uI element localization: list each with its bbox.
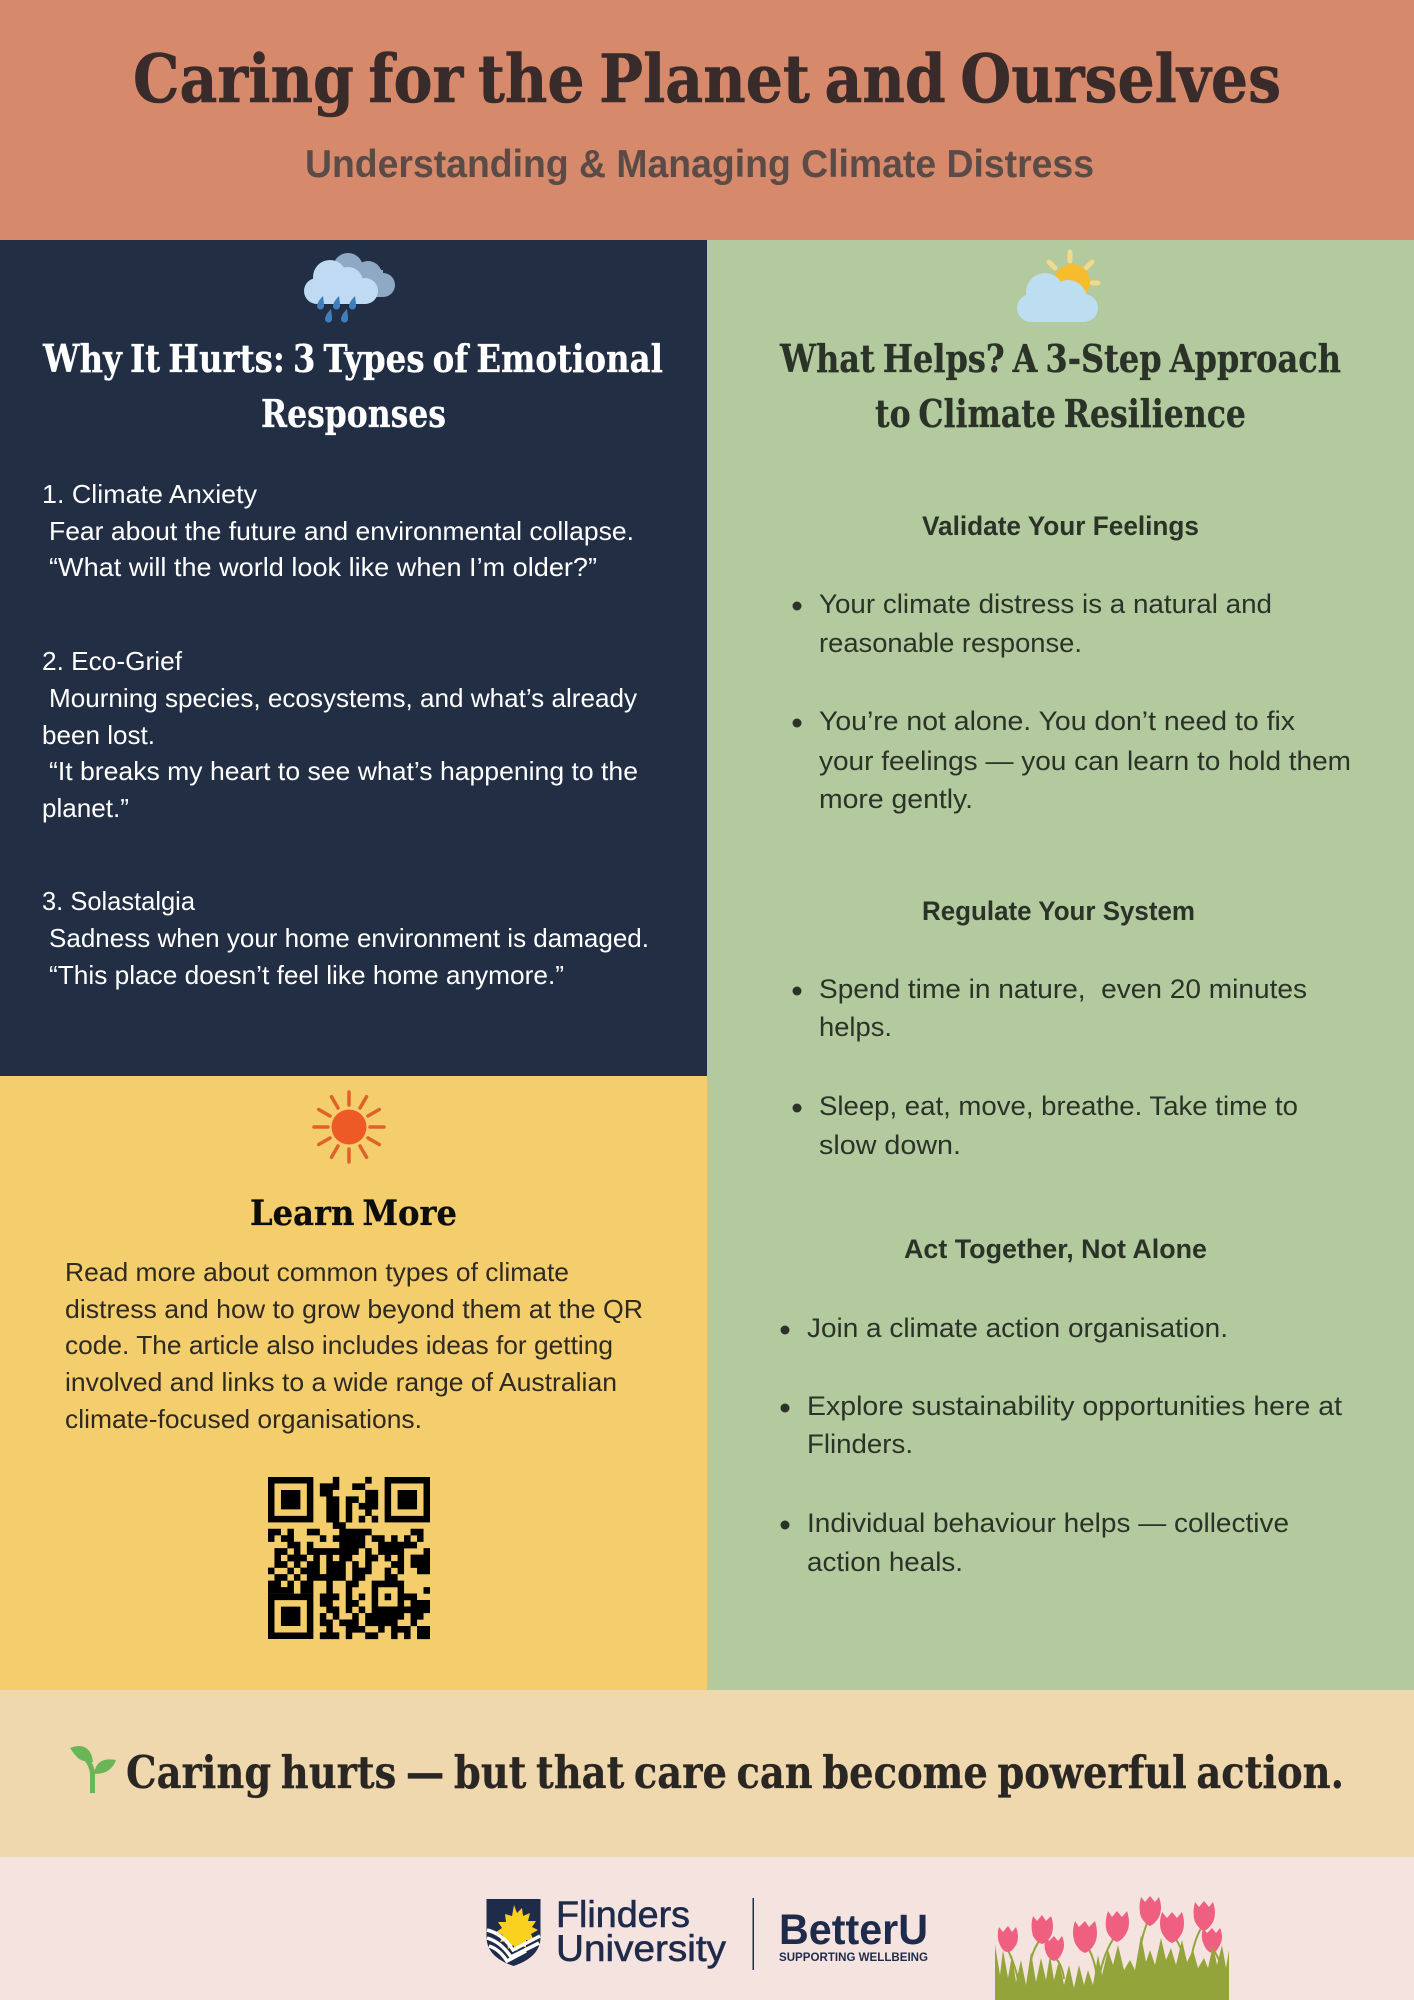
list: validate your feelings: You’re not alone. You don’t need to fix bbox=[819, 706, 1296, 736]
list: act together: Explore sustainability opportunities here at bbox=[807, 1391, 1343, 1421]
list: validate your feelings: more gently. bbox=[819, 784, 973, 814]
wordmark: Flinders University: Flinders bbox=[556, 1894, 690, 1935]
text block: solastalgia bbox=[42, 886, 649, 990]
text block: eco-grief: planet.” bbox=[42, 793, 129, 823]
panel: what helps bbox=[707, 240, 1414, 1690]
text block: eco-grief: been lost. bbox=[42, 720, 155, 750]
list: validate your feelings: reasonable response. bbox=[819, 628, 1082, 658]
text block: eco-grief: Mourning species, ecosystems, and what’s already bbox=[49, 683, 637, 713]
text block: solastalgia: “This place doesn’t feel like home anymore.” bbox=[49, 960, 564, 990]
text block: solastalgia: Sadness when your home environment is damaged. bbox=[49, 923, 649, 953]
subheading: act together: Act Together, Not Alone bbox=[904, 1234, 1207, 1264]
list: act together: action heals. bbox=[807, 1547, 963, 1577]
icon: sun bbox=[314, 1092, 384, 1162]
list: validate your feelings: Your climate distress is a natural and bbox=[819, 589, 1272, 619]
list: validate your feelings bbox=[792, 589, 1351, 814]
logo: Flinders University bbox=[486, 1894, 727, 1969]
text block: eco-grief: 2. Eco-Grief bbox=[42, 646, 183, 676]
text block: learn more body: climate-focused organisations. bbox=[65, 1404, 422, 1434]
icon: rain cloud bbox=[304, 253, 395, 322]
list: regulate your system: helps. bbox=[819, 1012, 892, 1042]
text block: solastalgia: 3. Solastalgia bbox=[42, 886, 196, 916]
list: regulate your system: slow down. bbox=[819, 1130, 961, 1160]
panel: closing banner bbox=[0, 1690, 1414, 1857]
text block: learn more body: involved and links to a wide range of Australian bbox=[65, 1367, 617, 1397]
list: act together bbox=[780, 1313, 1343, 1577]
text block: climate anxiety: Fear about the future and environmental collapse. bbox=[49, 516, 634, 546]
illustration: tulips and grass bbox=[995, 1896, 1229, 2000]
text block: climate anxiety bbox=[42, 479, 634, 582]
list: act together: Flinders. bbox=[807, 1429, 913, 1459]
heading: learn more: Learn More bbox=[250, 1193, 457, 1234]
list: regulate your system bbox=[792, 974, 1307, 1160]
logo: BetterU: BetterU bbox=[779, 1906, 928, 1954]
text block: climate anxiety: “What will the world look like when I’m older?” bbox=[49, 552, 597, 582]
panel: header bbox=[0, 0, 1414, 240]
text block: learn more body bbox=[65, 1257, 643, 1434]
text block: climate anxiety: 1. Climate Anxiety bbox=[42, 479, 257, 509]
icon: sprout bbox=[70, 1746, 116, 1793]
icon: shield bbox=[486, 1899, 540, 1966]
logo: BetterU: SUPPORTING WELLBEING bbox=[779, 1950, 928, 1964]
text block: learn more body: code. The article also includes ideas for getting bbox=[65, 1330, 613, 1360]
title: Caring for the Planet and Ourselves bbox=[133, 40, 1281, 118]
wordmark: Flinders University: University bbox=[556, 1928, 727, 1969]
subtitle: Understanding & Managing Climate Distress bbox=[305, 143, 1094, 186]
heading: why it hurts bbox=[42, 336, 663, 436]
icon: sun behind cloud bbox=[1017, 252, 1098, 322]
text block: learn more body: distress and how to grow beyond them at the QR bbox=[65, 1294, 643, 1324]
heading: what helps bbox=[779, 336, 1341, 436]
panel: learn more bbox=[0, 1076, 707, 1690]
list: regulate your system: Sleep, eat, move, breathe. Take time to bbox=[819, 1091, 1298, 1121]
list: act together: Individual behaviour helps — collective bbox=[807, 1508, 1289, 1538]
text block: eco-grief bbox=[42, 646, 638, 823]
subheading: validate your feelings: Validate Your Feelings bbox=[922, 511, 1199, 541]
QR code bbox=[268, 1477, 430, 1639]
text block: learn more body: Read more about common types of climate bbox=[65, 1257, 569, 1287]
text block: eco-grief: “It breaks my heart to see what’s happening to the bbox=[49, 756, 638, 786]
subheading: regulate your system: Regulate Your System bbox=[922, 896, 1195, 926]
heading: what helps: to Climate Resilience bbox=[875, 391, 1246, 436]
heading: why it hurts: Responses bbox=[261, 391, 446, 436]
list: validate your feelings: your feelings — you can learn to hold them bbox=[819, 746, 1351, 776]
list: act together: Join a climate action organisation. bbox=[807, 1313, 1228, 1343]
heading: why it hurts: Why It Hurts: 3 Types of Emotional bbox=[42, 336, 663, 381]
wordmark: Flinders University bbox=[556, 1894, 727, 1969]
panel: why it hurts bbox=[0, 240, 707, 1076]
list: regulate your system: Spend time in nature, even 20 minutes bbox=[819, 974, 1307, 1004]
panel: footer bbox=[0, 1857, 1414, 2000]
